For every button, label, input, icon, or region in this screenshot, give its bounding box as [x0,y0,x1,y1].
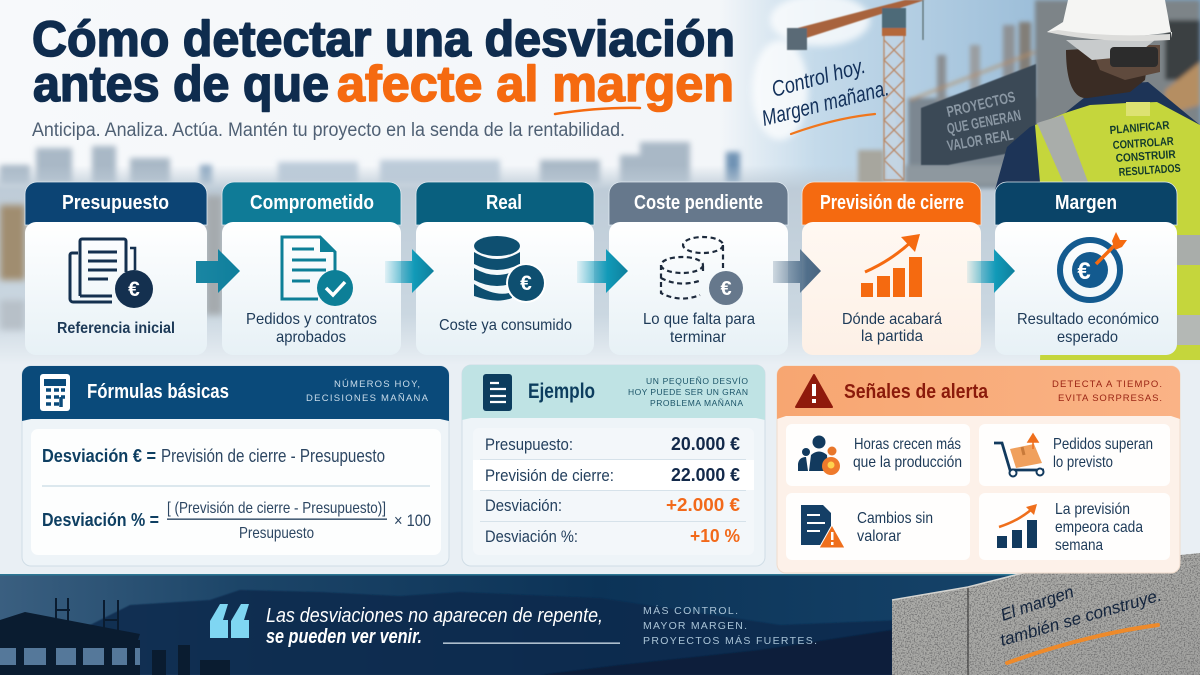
tile: cambios sin valorar: valorar [857,528,902,545]
panel: formulas basicas [22,366,449,566]
tile: pedidos superan: Pedidos superan [1053,436,1153,453]
concrete wall: el margen tambien se construye: El margen [998,582,1076,625]
tagline: MÁS CONTROL. [643,604,738,617]
card: margen [995,182,1177,355]
card: real: Real [486,192,522,214]
panel: ejemplo: +10 % [690,526,740,546]
panel: ejemplo: Desviación: [485,496,562,515]
icon: monedas con euro: € [520,272,532,295]
panel: ejemplo: Ejemplo [528,380,595,403]
vest text: CONSTRUIR [1115,149,1177,165]
card: coste pendiente [609,182,788,355]
icon: triangulo de alerta [796,375,832,407]
tile: horas crecen: que la producción [853,454,962,471]
panel: ejemplo: HOY PUEDE SER UN GRAN [628,387,748,397]
title: Cómo detectar una desviación [32,11,735,67]
icon: carrito con caja [994,434,1044,476]
vest text [1109,120,1181,179]
card: prevision de cierre: Previsión de cierre [820,192,964,214]
icon: diana con euro: € [1077,258,1091,285]
tile: pedidos superan: lo previsto [1053,454,1113,471]
quote [266,605,620,648]
tile: cambios sin valorar: Cambios sin [857,510,933,527]
bottom band: quote background [0,574,1200,675]
panel: formulas basicas: DECISIONES MAÑANA [306,393,429,404]
tile: horas crecen [786,424,970,486]
tagline: PROYECTOS MÁS FUERTES. [643,634,817,647]
tile: cambios sin valorar [786,493,970,560]
card: prevision de cierre [802,182,981,355]
tile: la prevision empeora [979,493,1170,560]
handwritten note: control hoy: Margen mañana. [759,75,891,131]
icon: monedas con euro [474,236,546,303]
quote: Las desviaciones no aparecen de repente, [266,605,603,627]
icon: calculadora [40,374,70,411]
vest text: CONTROLAR [1112,136,1175,152]
card: comprometido [222,182,401,355]
card: comprometido: Comprometido [250,192,374,214]
tile: la prevision empeora: La previsión [1055,501,1130,518]
panel: ejemplo [462,365,765,566]
card: prevision de cierre: Dónde acabará [842,311,942,328]
panel: formulas basicas: Presupuesto [239,525,314,542]
icon: personas [798,436,840,475]
icon: diana con euro [1060,232,1127,300]
silhouette: building under construction [0,598,230,675]
card: presupuesto: Referencia inicial [57,320,175,337]
banner: proyectos que generan valor real [921,64,1036,165]
arrow: prevision a margen [967,249,1015,293]
panel: ejemplo: 20.000 € [671,434,740,454]
card: presupuesto: Presupuesto [62,192,169,214]
card: margen: esperado [1057,329,1118,346]
icon: documento lista [483,374,512,411]
icon: barras con flecha [861,234,922,297]
vest text: PLANIFICAR [1109,120,1171,137]
icon: documento con check [282,236,353,306]
tile: horas crecen: Horas crecen más [854,436,961,453]
panel: senales de alerta: EVITA SORPRESAS. [1058,393,1162,404]
tile: la prevision empeora: empeora cada [1055,519,1143,536]
concrete wall: el margen tambien se construye [892,553,1200,675]
card: margen: Resultado económico [1017,311,1159,328]
panel: ejemplo: Presupuesto: [485,435,573,454]
icon: comillas [210,604,249,638]
card: comprometido: aprobados [276,329,346,346]
subtitle: Anticipa. Analiza. Actúa. Mantén tu proyecto en la senda de la rentabilidad. [32,120,625,141]
panel: ejemplo: +2.000 € [666,495,740,515]
card: presupuesto [25,182,207,355]
panel: senales de alerta [777,366,1180,573]
panel: ejemplo: Desviación %: [485,527,578,546]
card: prevision de cierre: la partida [861,328,923,345]
arrow: comprometido a real [385,249,434,293]
tagline [643,604,817,647]
background: crane and building [787,0,1200,188]
icon: documentos con euro [70,239,153,308]
arrow: presupuesto a comprometido [196,249,240,293]
handwritten note: control hoy [759,53,891,134]
handwritten note: control hoy: Control hoy. [769,53,868,102]
banner: proyectos que generan valor real: VALOR REAL [946,127,1015,155]
panel: ejemplo: Previsión de cierre: [485,466,614,485]
tile: la prevision empeora: semana [1055,537,1103,554]
card: coste pendiente: Lo que falta para [643,311,755,328]
concrete wall: el margen tambien se construye: también se construye. [998,586,1164,650]
icon: grafico con flecha [997,504,1037,548]
worker with helmet and vest [995,0,1200,360]
panel: formulas basicas: Previsión de cierre - Presupuesto [161,446,385,466]
panel: formulas basicas: NÚMEROS HOY, [334,379,420,390]
panel: ejemplo: PROBLEMA MAÑANA [650,398,743,408]
card: coste pendiente: Coste pendiente [634,192,763,214]
tagline: MAYOR MARGEN. [643,620,747,632]
card: comprometido: Pedidos y contratos [246,311,377,328]
panel: ejemplo: UN PEQUEÑO DESVÍO [646,376,748,386]
banner: proyectos que generan valor real: QUE GENERAN [946,107,1022,138]
quote: se pueden ver venir. [266,626,422,648]
card: real [416,182,594,355]
card: real: Coste ya consumido [439,317,572,334]
panel: formulas basicas: [ (Previsión de cierre - Presupuesto)] [167,500,386,517]
card: margen: Margen [1055,192,1117,214]
icon: monedas punteadas con euro [661,237,743,305]
panel: ejemplo: 22.000 € [671,465,740,485]
icon: documento con alerta [801,505,845,548]
arrow: real a coste pendiente [577,249,628,293]
panel: formulas basicas: Desviación € = [42,446,156,466]
panel: formulas basicas: Desviación % = [42,510,159,530]
vest text: RESULTADOS [1118,163,1181,179]
panel: senales de alerta: Señales de alerta [844,381,989,403]
tile: pedidos superan [979,424,1170,486]
banner: proyectos que generan valor real: PROYECTOS [945,89,1017,121]
icon: documentos con euro: € [128,278,140,301]
panel: senales de alerta: DETECTA A TIEMPO. [1052,379,1162,390]
panel: formulas basicas: Fórmulas básicas [87,381,229,403]
arrow: coste pendiente a prevision [773,249,821,293]
panel: formulas basicas: × 100 [394,511,431,530]
icon: monedas punteadas con euro: € [720,278,732,300]
card: coste pendiente: terminar [670,329,727,346]
title: afecte al margen [337,56,734,112]
title: antes de que [33,56,329,112]
title [32,11,735,114]
